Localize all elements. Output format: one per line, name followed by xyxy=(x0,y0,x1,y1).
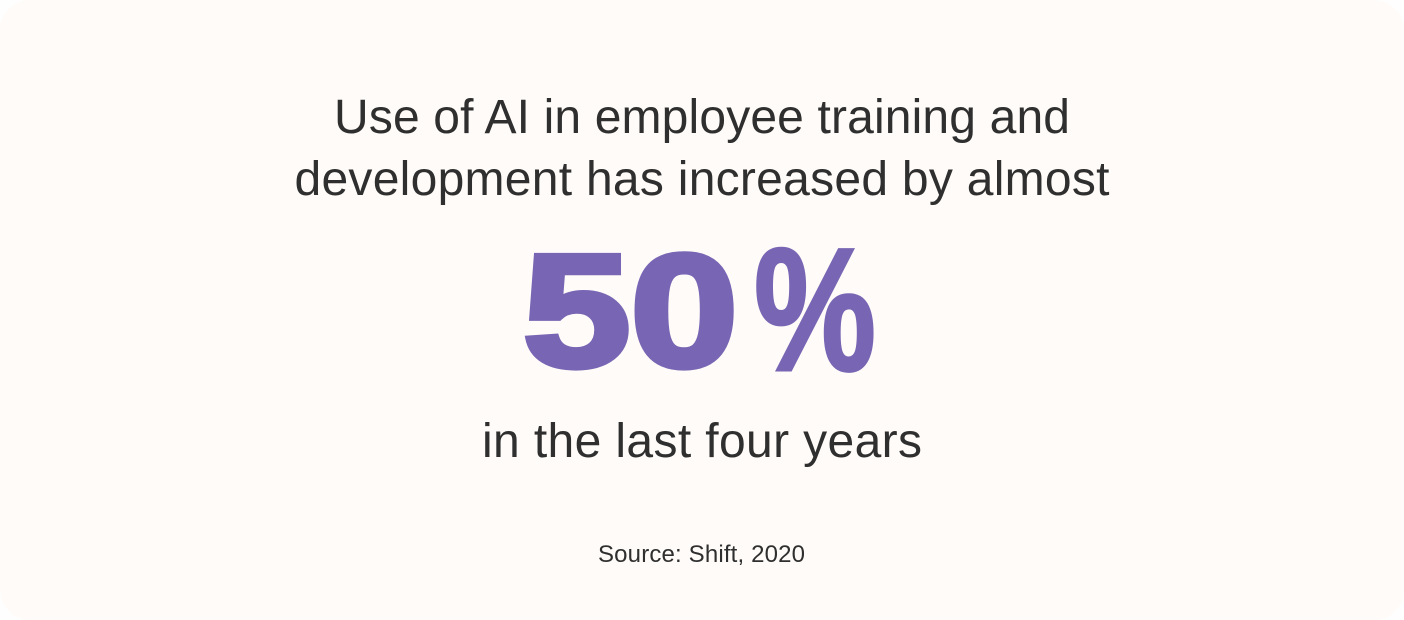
heading: statistic introduction: Use of AI in employee training and xyxy=(334,91,1070,144)
big number: 50%: 50 xyxy=(523,221,738,400)
source note: Source: Shift, 2020 xyxy=(598,541,805,568)
big number: 50%: % xyxy=(754,213,876,408)
text: time period: in the last four years xyxy=(482,415,922,468)
big number: 50% xyxy=(523,213,876,408)
heading: statistic introduction xyxy=(294,91,1110,206)
heading: statistic introduction: development has increased by almost xyxy=(294,153,1110,206)
